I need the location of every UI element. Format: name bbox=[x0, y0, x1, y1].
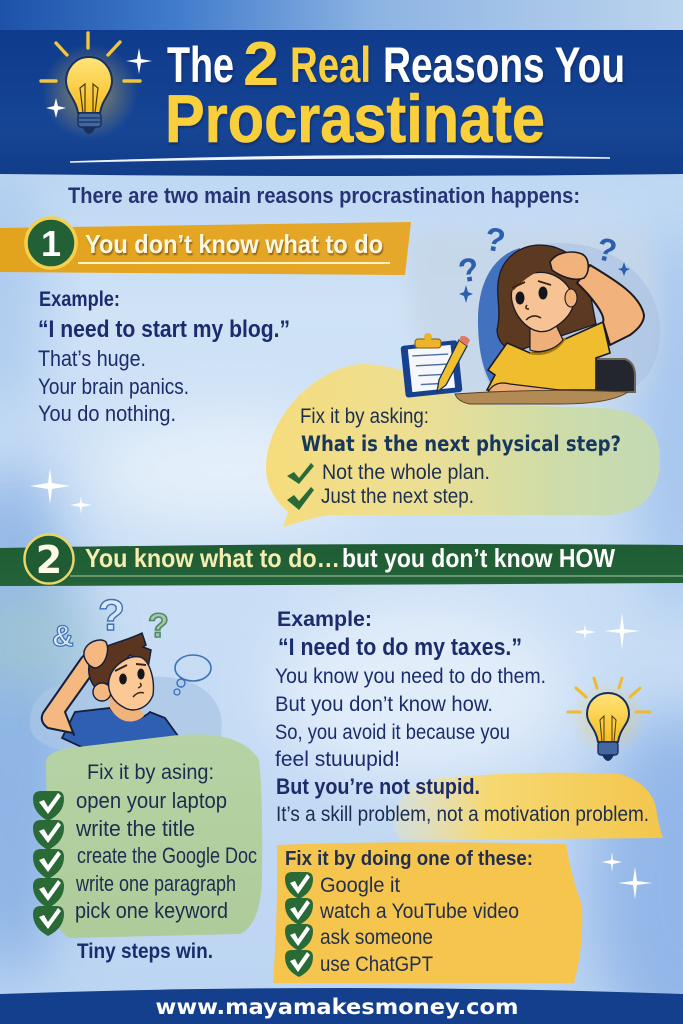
eyes and brows bbox=[516, 292, 524, 304]
badge: number 1: 1 bbox=[41, 223, 61, 264]
text block: example 1: Example: bbox=[39, 288, 120, 311]
mouth bbox=[133, 683, 144, 697]
text block: example 1: Your brain panics. bbox=[38, 374, 189, 399]
header band bbox=[0, 30, 683, 176]
mouth and nose bbox=[526, 305, 541, 320]
panel: fix it by doing: Fix it by doing one of these: bbox=[285, 848, 533, 870]
text block: example 1 bbox=[38, 288, 290, 426]
question marks: ? bbox=[483, 220, 508, 259]
sparkles bbox=[30, 468, 652, 899]
illustration: confused girl at desk: ? bbox=[593, 230, 620, 270]
badge: number 2: 2 bbox=[36, 538, 62, 582]
checklist row: watch a YouTube video bbox=[319, 899, 519, 923]
checklist row: write the title bbox=[75, 816, 195, 841]
checklist row bbox=[33, 788, 227, 821]
eyes and brows bbox=[119, 674, 127, 684]
highlight: skill problem blob bbox=[394, 773, 663, 840]
heading: section 2: You know what to do… bbox=[85, 543, 340, 573]
panel: tiny steps checklist bbox=[33, 734, 262, 938]
checklist row: ask someone bbox=[320, 925, 433, 949]
checklist row bbox=[33, 843, 257, 879]
forearm on desk bbox=[488, 383, 560, 392]
text block: example 1: You do nothing. bbox=[38, 401, 176, 426]
section 2 banner: but you don’t know HOW bbox=[342, 543, 615, 573]
text block: example 2: So, you avoid it because you bbox=[275, 721, 510, 744]
section 2 banner bbox=[0, 534, 683, 586]
neck bbox=[110, 695, 144, 722]
callout: fix it by asking bbox=[266, 364, 660, 527]
callout: fix it by asking: What is the next physical step? bbox=[301, 432, 621, 456]
fringe bbox=[509, 257, 562, 292]
shirt bbox=[487, 322, 610, 390]
backdrop behind girl bbox=[408, 230, 660, 404]
hair bbox=[89, 633, 151, 692]
panel: tiny steps checklist: Fix it by asing: bbox=[87, 760, 214, 784]
backdrop blob bbox=[30, 676, 222, 750]
tiny steps win: Tiny steps win. bbox=[77, 940, 213, 963]
desk bbox=[455, 390, 628, 404]
face bbox=[511, 272, 573, 332]
checklist row bbox=[285, 872, 400, 899]
illustration: confused man: ? bbox=[148, 607, 169, 645]
checklist row: write one paragraph bbox=[75, 871, 236, 896]
text block: example 2: “I need to do my taxes.” bbox=[278, 634, 522, 661]
hand on head bbox=[550, 252, 588, 279]
badge: number 2 bbox=[24, 534, 74, 584]
title: The bbox=[167, 37, 234, 93]
text block: example 1: That’s huge. bbox=[38, 346, 146, 371]
pencil bbox=[437, 336, 470, 392]
checklist row bbox=[33, 898, 228, 936]
chair bbox=[596, 359, 635, 392]
checklist row: use ChatGPT bbox=[320, 952, 433, 976]
text block: example 2: You know you need to do them. bbox=[275, 665, 546, 688]
text block: example 1: “I need to start my blog.” bbox=[38, 316, 290, 343]
hand on head bbox=[84, 640, 108, 668]
neck bbox=[530, 325, 563, 352]
title: Real bbox=[290, 37, 371, 93]
text block: example 2: But you don’t know how. bbox=[275, 693, 493, 716]
checklist row bbox=[33, 816, 195, 850]
ear bbox=[565, 289, 577, 307]
clipboard bbox=[400, 333, 463, 398]
icon: check bbox=[287, 463, 314, 484]
collar bbox=[530, 338, 565, 354]
checklist row: Google it bbox=[320, 873, 400, 897]
section 1 banner bbox=[0, 218, 411, 275]
panel: fix it by doing bbox=[273, 842, 582, 983]
arm raised bbox=[577, 265, 644, 345]
checklist row bbox=[285, 898, 519, 925]
ear bbox=[93, 683, 111, 701]
icon: lightbulb in header bbox=[41, 33, 152, 140]
text: just the next step: Just the next step. bbox=[321, 484, 474, 508]
title: 2 bbox=[243, 30, 279, 99]
checklist row bbox=[285, 950, 433, 977]
question mark outlines: ? bbox=[98, 591, 125, 640]
intro text: There are two main reasons procrastination happens: bbox=[68, 183, 580, 208]
icon: lightbulb right bbox=[568, 678, 650, 761]
arm raised bbox=[42, 652, 104, 735]
title bbox=[165, 30, 625, 157]
text block: example 2: Example: bbox=[277, 608, 372, 631]
text block: example 2 bbox=[275, 608, 649, 826]
footer band bbox=[0, 988, 683, 1024]
heading: section 1: You don’t know what to do bbox=[85, 229, 383, 259]
illustration: confused man bbox=[30, 591, 222, 751]
checklist row: create the Google Doc bbox=[77, 843, 257, 868]
footer url: www.mayamakesmoney.com bbox=[156, 995, 518, 1019]
header underline bbox=[70, 156, 610, 162]
illustration: confused girl at desk: ? bbox=[456, 250, 482, 290]
illustration: confused man: & bbox=[52, 620, 74, 653]
checklist row bbox=[33, 871, 236, 908]
face bbox=[109, 657, 153, 710]
badge: number 1 bbox=[26, 218, 76, 268]
title: Procrastinate bbox=[165, 81, 545, 157]
text block: example 2: feel stuuupid! bbox=[275, 748, 400, 771]
checklist row: pick one keyword bbox=[75, 898, 228, 923]
checklist row: open your laptop bbox=[76, 788, 227, 813]
illustration: confused girl at desk bbox=[400, 220, 644, 404]
thought bubbles bbox=[175, 655, 211, 681]
icon: check bbox=[287, 487, 314, 510]
hair back bbox=[497, 245, 596, 350]
text block: example 2: But you’re not stupid. bbox=[276, 774, 480, 799]
shirt bbox=[62, 708, 178, 751]
text: not the whole plan: Not the whole plan. bbox=[322, 460, 490, 484]
text block: example 2: It’s a skill problem, not a motivation problem. bbox=[276, 803, 649, 826]
checklist row bbox=[285, 924, 433, 951]
callout: fix it by asking: Fix it by asking: bbox=[300, 405, 429, 428]
